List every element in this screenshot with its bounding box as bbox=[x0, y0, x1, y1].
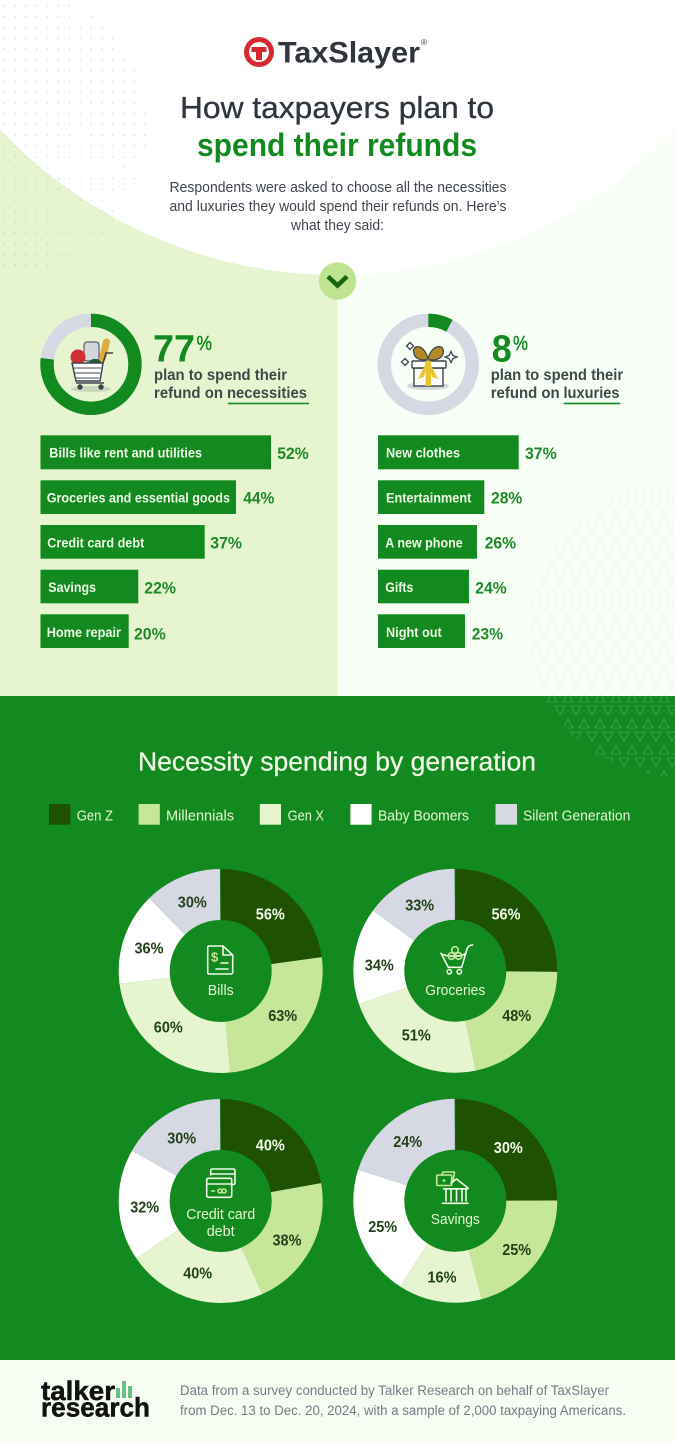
bar: entertainment: 28% bbox=[491, 490, 523, 508]
footer bbox=[0, 1360, 675, 1442]
stat: 8 percent: 8 bbox=[492, 329, 512, 371]
donut: credit card debt: Credit card bbox=[186, 1207, 255, 1223]
donut: groceries: 48% bbox=[502, 1008, 531, 1025]
source note: Data from a survey conducted by Talker Research on behalf of TaxSlayer bbox=[180, 1383, 609, 1398]
donut: groceries: 33% bbox=[405, 897, 434, 914]
stat: 8 percent: refund on bbox=[491, 385, 560, 402]
icon: gift bbox=[402, 342, 457, 390]
legend: Silent Generation bbox=[523, 808, 630, 824]
bar: bills: 52% bbox=[277, 445, 309, 463]
donut: savings: 24% bbox=[393, 1134, 422, 1151]
section heading: Necessity spending by generation bbox=[138, 749, 536, 777]
bar: gifts: Gifts bbox=[385, 580, 413, 595]
intro text: and luxuries they would spend their refunds on. Here’s bbox=[170, 199, 506, 215]
title bbox=[180, 90, 494, 163]
header white arc bbox=[0, 0, 675, 275]
donut: bills: 60% bbox=[154, 1019, 183, 1036]
donut: 8 percent bbox=[384, 320, 472, 408]
bar: entertainment bbox=[378, 480, 523, 514]
donut: credit card debt: 40% bbox=[183, 1266, 212, 1283]
donut: savings: Savings bbox=[431, 1212, 480, 1228]
bar: home repair: 20% bbox=[134, 625, 166, 643]
triangle pattern light bbox=[525, 483, 675, 696]
stat: 77 percent: plan to spend their bbox=[154, 367, 287, 384]
donut: groceries: Groceries bbox=[425, 983, 485, 999]
background: luxuries side bbox=[338, 100, 675, 696]
logo: talker research: talker bbox=[41, 1376, 115, 1406]
donut: groceries: 51% bbox=[402, 1027, 431, 1044]
bar: new clothes: New clothes bbox=[386, 445, 460, 460]
legend: Millennials bbox=[166, 808, 234, 824]
bar: new clothes: 37% bbox=[525, 445, 557, 463]
stat: 77 percent: 77 bbox=[153, 329, 195, 371]
title: spend their refunds bbox=[197, 127, 477, 163]
bar: credit card debt bbox=[40, 525, 242, 559]
donut: groceries: 56% bbox=[492, 907, 520, 924]
donut: bills: 30% bbox=[178, 895, 207, 912]
logo: talker research: research bbox=[41, 1393, 150, 1423]
bar: groceries bbox=[40, 480, 275, 514]
bar: savings: 22% bbox=[144, 580, 176, 598]
background: necessities side bbox=[0, 100, 338, 696]
logo: TaxSlayer: ® bbox=[421, 38, 427, 47]
bar: home repair bbox=[40, 614, 166, 648]
donut: savings: 30% bbox=[494, 1140, 523, 1157]
icon: grocery cart bbox=[70, 338, 113, 392]
panel: luxuries bbox=[378, 320, 623, 648]
donut: credit card debt: 40% bbox=[256, 1137, 285, 1154]
donut: bills: 36% bbox=[134, 940, 164, 957]
intro text: Respondents were asked to choose all the necessities bbox=[170, 180, 506, 196]
donut: credit card debt bbox=[130, 1124, 302, 1283]
bar: gifts: 24% bbox=[475, 580, 507, 598]
stat: 77 percent: necessities bbox=[227, 385, 307, 402]
donut: bills: 56% bbox=[256, 907, 285, 924]
bar: gifts bbox=[378, 570, 507, 603]
bar: credit card debt: 37% bbox=[210, 535, 242, 553]
donut: bills: 63% bbox=[268, 1008, 297, 1025]
intro text: what they said: bbox=[290, 218, 384, 234]
stat: 8 percent: luxuries bbox=[564, 385, 620, 402]
bar: savings bbox=[40, 570, 176, 603]
donut: savings: 16% bbox=[428, 1269, 456, 1286]
bar: home repair: Home repair bbox=[47, 625, 122, 640]
bar: bills bbox=[40, 435, 309, 469]
legend bbox=[49, 804, 630, 825]
icon: bank and cash bbox=[437, 1172, 468, 1203]
bar: night out: 23% bbox=[472, 625, 503, 643]
bar: credit card debt: Credit card debt bbox=[47, 535, 145, 550]
donut: credit card debt: 38% bbox=[272, 1233, 302, 1250]
bar: bills: Bills like rent and utilities bbox=[49, 445, 202, 460]
dotted pattern bbox=[0, 0, 150, 280]
intro text bbox=[170, 180, 506, 234]
donut: savings bbox=[368, 1124, 532, 1286]
donut: credit card debt: 32% bbox=[130, 1199, 159, 1216]
bar: night out: Night out bbox=[386, 625, 442, 640]
donut: groceries: 34% bbox=[365, 957, 394, 974]
stat: 77 percent: % bbox=[196, 333, 212, 355]
chevron badge bbox=[319, 262, 356, 300]
stat: 8 percent: % bbox=[513, 333, 528, 355]
bar chart: necessities bbox=[40, 435, 309, 648]
bar: night out bbox=[378, 614, 503, 648]
stat: 8 percent bbox=[491, 329, 623, 404]
bar: savings: Savings bbox=[48, 580, 96, 595]
icon: bill document bbox=[208, 946, 233, 974]
donut: credit card debt: 30% bbox=[167, 1130, 196, 1147]
donut: groceries bbox=[365, 894, 532, 1047]
legend: Gen X bbox=[288, 808, 324, 824]
donut: savings: 25% bbox=[368, 1219, 397, 1236]
icon: bill document: $ bbox=[211, 950, 219, 964]
stat: 77 percent bbox=[153, 329, 309, 404]
donut: 77 percent bbox=[47, 320, 135, 408]
donut: credit card debt: debt bbox=[207, 1224, 235, 1240]
bar: groceries: Groceries and essential goods bbox=[47, 490, 230, 505]
legend: Gen Z bbox=[77, 808, 113, 824]
panel: necessities bbox=[40, 320, 309, 648]
legend: Baby Boomers bbox=[378, 808, 469, 824]
stat: 8 percent: plan to spend their bbox=[491, 367, 623, 384]
bar: entertainment: Entertainment bbox=[386, 490, 472, 505]
donut: savings: 25% bbox=[502, 1242, 531, 1259]
donut: bills: Bills bbox=[208, 983, 234, 999]
bar: a new phone: 26% bbox=[485, 535, 516, 553]
logo: TaxSlayer: TaxSlayer bbox=[278, 36, 420, 70]
source note: from Dec. 13 to Dec. 20, 2024, with a sample of 2,000 taxpaying Americans. bbox=[180, 1403, 626, 1418]
icon: credit cards bbox=[207, 1169, 235, 1197]
bar: a new phone: A new phone bbox=[385, 535, 463, 550]
panel: necessity spending by generation bbox=[0, 696, 675, 1360]
stat: 77 percent: refund on bbox=[154, 385, 223, 402]
bar: new clothes bbox=[378, 435, 557, 469]
source note bbox=[180, 1383, 626, 1418]
logo: talker research bbox=[41, 1376, 150, 1423]
bar: a new phone bbox=[378, 525, 516, 559]
bar chart: luxuries bbox=[378, 435, 557, 648]
bar: groceries: 44% bbox=[243, 490, 275, 508]
donut: bills bbox=[134, 894, 297, 1048]
icon: shopping basket bbox=[441, 945, 473, 974]
title: How taxpayers plan to bbox=[180, 90, 494, 125]
